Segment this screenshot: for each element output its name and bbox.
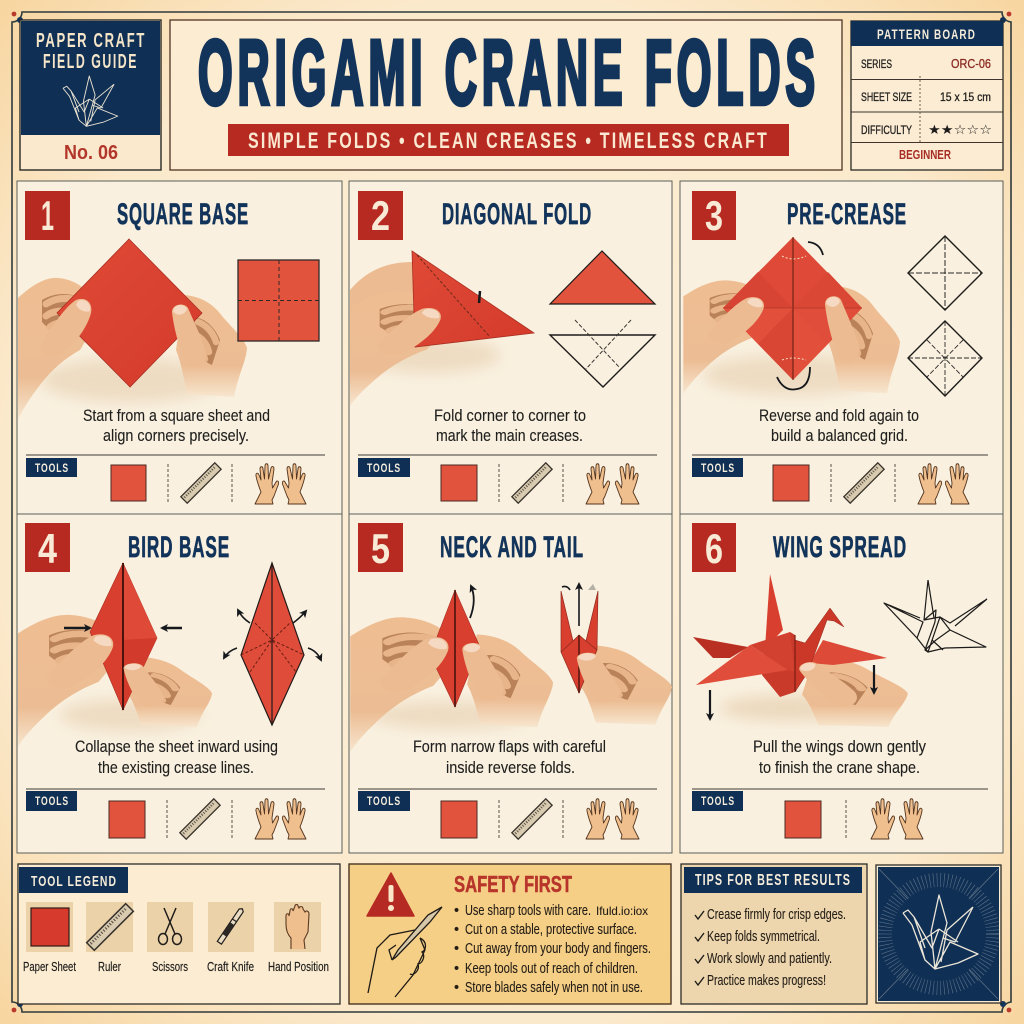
board rows: ★★☆☆☆ <box>928 123 992 138</box>
icon: crane line art <box>903 895 978 969</box>
icon: warning triangle <box>367 873 414 916</box>
diagram: crease diamond one <box>908 236 982 310</box>
panel: safety first <box>349 864 671 1004</box>
step heading: WING SPREAD <box>773 531 907 564</box>
step number <box>25 191 70 240</box>
step number: 6 <box>705 525 723 572</box>
arrow: right inward <box>162 627 182 629</box>
issue number: No. 06 <box>64 142 118 164</box>
step number <box>358 191 403 240</box>
tools row <box>26 458 306 504</box>
diagram: crease diamond two <box>908 321 982 396</box>
tips heading: TIPS FOR BEST RESULTS <box>695 872 851 889</box>
arrow: left inward <box>64 627 90 629</box>
subtitle banner <box>228 124 789 156</box>
step description: Pull the wings down gently <box>753 737 926 756</box>
illustration: hands forming narrow flaps <box>350 586 553 752</box>
panel: step 3 pre-crease <box>680 181 1003 514</box>
icon: hand with craft knife <box>368 907 442 997</box>
step description: mark the main creases. <box>436 426 583 445</box>
step number: 2 <box>371 192 390 239</box>
arrow: top rotation <box>808 242 823 255</box>
illustration: hands collapsing kite <box>18 563 212 747</box>
step number: 1 <box>41 192 54 239</box>
tools row <box>692 791 923 839</box>
illustration: hand with neck and tail <box>561 584 672 725</box>
safety bullet list: • <box>454 922 459 938</box>
illustration: hand folding triangle <box>350 251 534 406</box>
step heading: BIRD BASE <box>128 531 230 564</box>
safety bullet list: Keep tools out of reach of children. <box>465 961 638 977</box>
step heading: NECK AND TAIL <box>440 531 584 564</box>
step description: align corners precisely. <box>103 426 249 445</box>
tools row: TOOLS <box>367 796 401 808</box>
safety bullet list: Ifuld.io:iox <box>596 904 648 918</box>
step description: Fold corner to corner to <box>434 406 586 425</box>
step description: inside reverse folds. <box>446 758 575 777</box>
step description: to finish the crane shape. <box>759 758 920 777</box>
safety bullet list: Use sharp tools with care. <box>465 903 591 919</box>
panel: step 5 neck and tail <box>349 514 672 853</box>
diagram: filled triangle <box>550 251 655 304</box>
step description: Start from a square sheet and <box>83 406 270 425</box>
step number <box>692 191 736 240</box>
step description: Reverse and fold again to <box>759 406 919 425</box>
legend item: scissors: Scissors <box>152 959 188 974</box>
panel: step 2 diagonal fold <box>349 181 672 514</box>
panel: title <box>170 20 842 170</box>
tools row: TOOLS <box>367 463 401 475</box>
legend item: scissors <box>147 902 193 974</box>
tips checklist: Practice makes progress! <box>707 973 826 989</box>
board heading: PATTERN BOARD <box>877 27 976 42</box>
diagram: line drawing crane <box>884 580 987 652</box>
legend item: craft knife: Craft Knife <box>207 959 254 974</box>
tools row: TOOLS <box>35 463 69 475</box>
panel: step 4 bird base <box>17 514 342 853</box>
panel: tool legend <box>18 864 340 1004</box>
tools row <box>692 458 969 504</box>
board rows: DIFFICULTY <box>861 123 912 137</box>
badge heading: PAPER CRAFT <box>36 30 146 52</box>
tools row: TOOLS <box>701 463 735 475</box>
step number: 5 <box>371 525 390 572</box>
panel: crane emblem <box>876 865 1001 1003</box>
illustration: hands holding diamond sheet <box>18 239 247 420</box>
step description: build a balanced grid. <box>771 426 908 445</box>
safety bullet list <box>454 903 651 996</box>
step description: Collapse the sheet inward using <box>75 737 278 756</box>
safety bullet list: Cut away from your body and fingers. <box>465 941 651 957</box>
step number: 3 <box>705 192 723 239</box>
diagram: crease triangle <box>550 320 655 387</box>
legend item: ruler: Ruler <box>98 959 121 974</box>
step heading: PRE-CREASE <box>787 198 907 231</box>
step number <box>692 523 736 572</box>
tips heading <box>684 867 862 893</box>
board rows: ORC-06 <box>951 56 991 71</box>
step heading: DIAGONAL FOLD <box>442 198 592 231</box>
tips checklist <box>695 907 846 989</box>
safety bullet list: • <box>454 941 459 957</box>
step number: 4 <box>38 525 58 572</box>
safety bullet list: Cut on a stable, protective surface. <box>465 922 637 938</box>
board rows: SHEET SIZE <box>861 90 912 104</box>
arrow: bottom rotation <box>777 367 810 390</box>
tools row <box>358 791 639 839</box>
legend item: paper sheet: Paper Sheet <box>23 959 76 974</box>
arrow: up curve <box>470 586 474 618</box>
step description: the existing crease lines. <box>98 758 254 777</box>
safety bullet list: • <box>454 980 459 996</box>
diagram: kite with crease lines and arrows <box>224 563 321 725</box>
panel: step 6 wing spread <box>680 514 1003 853</box>
legend item: hand position <box>268 902 329 974</box>
illustration: red crane held by hand <box>693 574 908 727</box>
panel: tips for best results <box>681 864 867 1004</box>
step description: Form narrow flaps with careful <box>413 737 606 756</box>
panel: step 1 square base <box>17 181 342 514</box>
safety bullet list: • <box>454 903 459 919</box>
step heading: SQUARE BASE <box>117 198 249 231</box>
legend heading <box>19 867 128 893</box>
step number <box>25 523 70 572</box>
arrow: wing down right <box>873 665 875 693</box>
legend item: hand position: Hand Position <box>268 959 329 974</box>
tools row: TOOLS <box>35 796 69 808</box>
safety bullet list: Store blades safely when not in use. <box>465 980 643 996</box>
tools row <box>26 791 306 839</box>
legend heading: TOOL LEGEND <box>31 873 117 890</box>
badge heading: FIELD GUIDE <box>43 51 138 73</box>
legend item: ruler <box>86 902 133 974</box>
illustration: hands on creased diamond <box>683 237 900 395</box>
tips checklist: Work slowly and patiently. <box>707 951 832 967</box>
safety heading: SAFETY FIRST <box>454 871 572 897</box>
legend item: paper sheet <box>23 902 76 974</box>
diagram: square with crease lines <box>238 260 319 341</box>
board rows: 15 x 15 cm <box>940 90 991 104</box>
safety bullet list: • <box>454 961 459 977</box>
tools row <box>358 458 639 504</box>
panel: field guide badge <box>20 20 161 170</box>
arrow: center up <box>578 584 580 626</box>
icon: badge crane <box>63 76 118 126</box>
step number <box>358 523 403 572</box>
tips checklist: Keep folds symmetrical. <box>707 929 820 945</box>
tools row: TOOLS <box>701 796 735 808</box>
panel: pattern board <box>851 21 1003 170</box>
arrow: wing down left <box>709 690 711 719</box>
board rows: BEGINNER <box>899 148 951 162</box>
board rows: SERIES <box>861 57 892 71</box>
board rows <box>861 56 992 162</box>
tips checklist: Crease firmly for crisp edges. <box>707 907 846 923</box>
subtitle banner: SIMPLE FOLDS • CLEAN CREASES • TIMELESS CRAFT <box>248 128 769 153</box>
legend item: craft knife <box>207 902 254 974</box>
